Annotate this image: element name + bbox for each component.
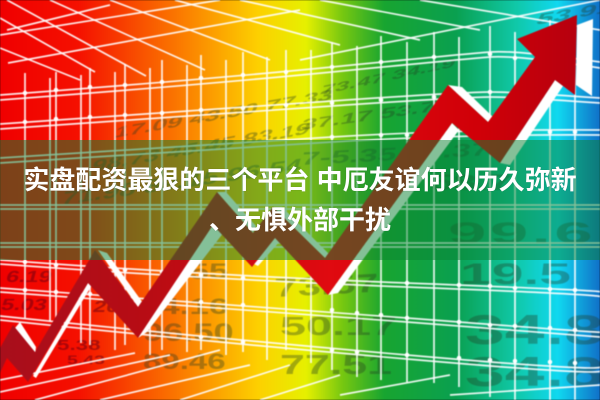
faded stock numbers: 34.8 bbox=[465, 349, 600, 395]
grid node dots bbox=[25, 54, 575, 363]
faded stock numbers: 5.03 bbox=[0, 296, 49, 314]
faded stock numbers: 6.19 bbox=[4, 268, 54, 286]
faded stock numbers: 99.6 bbox=[448, 216, 596, 250]
faded stock numbers: 58.7 bbox=[430, 171, 512, 195]
faded stock numbers: 73.47 34.19 bbox=[319, 55, 458, 98]
faded stock numbers: 96.50 bbox=[143, 319, 234, 347]
title: 、无惧外部干扰 bbox=[209, 205, 391, 235]
faded stock numbers: 98.73 45.45 83.19 bbox=[89, 118, 314, 176]
title band bbox=[0, 140, 600, 260]
title: 实盘配资最狠的三个平台 中厄友谊何以历久弥新 bbox=[23, 165, 577, 195]
faded stock numbers: 37.17 53.75 bbox=[299, 95, 454, 133]
faded stock numbers: 89.46 bbox=[143, 349, 226, 374]
faded stock numbers: 7-5.35 15.37 bbox=[299, 138, 492, 169]
faded stock numbers: 5.43 bbox=[67, 354, 105, 367]
faded stock numbers: 34.8 bbox=[465, 307, 600, 353]
faded stock numbers: 73.57 bbox=[274, 269, 379, 303]
faded stock numbers: 4.16 bbox=[160, 295, 229, 319]
faded stock numbers: 19.5 bbox=[460, 257, 571, 291]
faded stock numbers: 50.17 bbox=[280, 312, 397, 341]
faded stock numbers: 4.55 bbox=[160, 260, 229, 284]
faded stock numbers: 77.51 bbox=[280, 349, 392, 380]
title bbox=[23, 165, 577, 235]
faded stock numbers: 20.7 bbox=[91, 298, 141, 316]
faded stock numbers: 17.09 43.50 77.33 bbox=[112, 85, 337, 141]
faded stock numbers: 5.38 bbox=[57, 337, 101, 353]
faded stock numbers: 71.98 89.15 96.54 bbox=[59, 155, 306, 209]
